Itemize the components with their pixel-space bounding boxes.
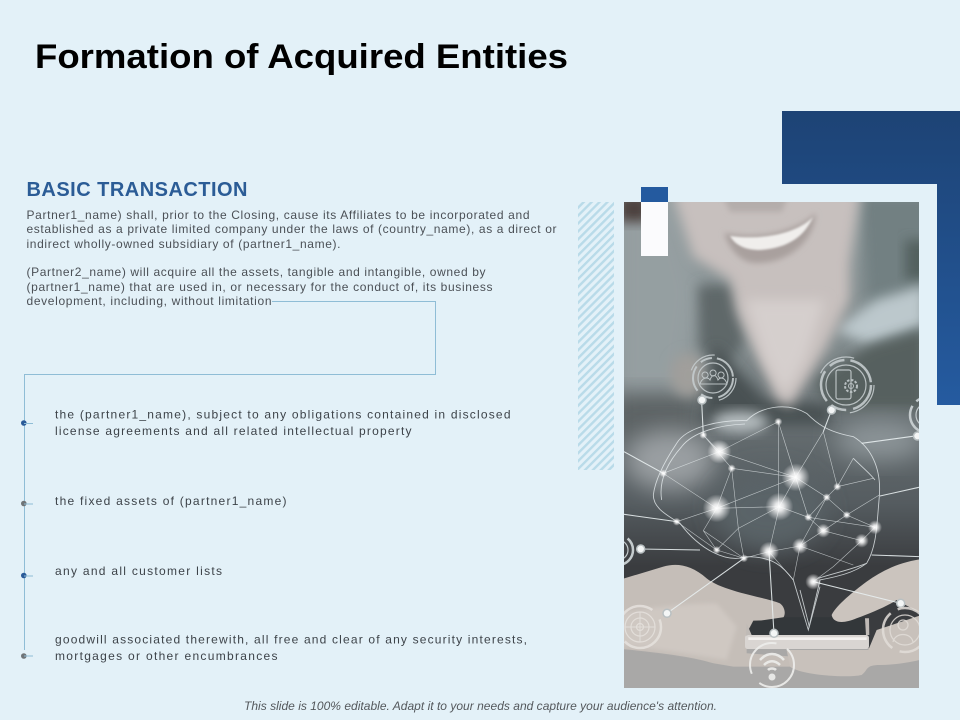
icon: phone with gear <box>818 357 874 413</box>
decorative blue L-shaped block <box>782 111 960 405</box>
list item 1: license agreements and all related intellectual property <box>55 424 412 438</box>
text block: first paragraph: established as a private limited company under the laws of (country_name), as a direct or <box>26 222 556 236</box>
text block: second paragraph: (partner1_name) that are used in, or necessary for the conduct of, its business <box>26 280 493 294</box>
text block: first paragraph: indirect wholly-owned subsidiary of (partner1_name). <box>26 237 341 251</box>
lower right hand <box>787 613 927 676</box>
connector line from paragraph to list <box>24 302 436 650</box>
list item 1: the (partner1_name), subject to any obligations contained in disclosed <box>55 408 510 422</box>
list item 2: the fixed assets of (partner1_name) <box>55 494 286 508</box>
striped decorative panel <box>578 202 614 470</box>
list item 4: goodwill associated therewith, all free and clear of any security interests, <box>55 632 527 646</box>
brain outline <box>653 407 880 630</box>
list item 1 <box>21 408 510 438</box>
left hand <box>613 565 793 667</box>
right upper fingers <box>832 558 927 622</box>
text block: first paragraph: Partner1_name) shall, prior to the Closing, cause its Affiliates to be incorporated and <box>26 208 530 222</box>
phone body <box>745 618 869 649</box>
text block: second paragraph: (Partner2_name) will acquire all the assets, tangible and intangible, owned by <box>26 265 486 279</box>
list item 4: mortgages or other encumbrances <box>55 649 278 663</box>
face and neck <box>668 180 862 407</box>
photo: woman with phone and brain network <box>624 202 919 688</box>
table surface <box>624 648 919 688</box>
text block: second paragraph: development, including, without limitation <box>26 294 272 308</box>
title: Formation of Acquired Entities <box>35 38 568 76</box>
white tab over photo <box>641 202 668 256</box>
icon: wifi <box>750 643 794 687</box>
footer note: This slide is 100% editable. Adapt it to your needs and capture your audience's attention. <box>244 699 717 713</box>
brain network <box>624 402 919 633</box>
smile <box>724 213 816 263</box>
list item 4 <box>21 632 527 663</box>
network mesh lines <box>663 422 879 582</box>
text block: second paragraph <box>26 265 493 308</box>
outgoing spokes <box>624 402 919 633</box>
text block: first paragraph <box>26 208 556 251</box>
icon: partial ring left <box>624 538 634 566</box>
left hand shading <box>624 605 734 658</box>
icon: partial ring right <box>908 398 919 432</box>
icon: target <box>619 606 661 648</box>
phone screen <box>762 617 784 620</box>
white endpoint dots <box>637 396 922 637</box>
icon: people <box>690 355 736 401</box>
list item 3: any and all customer lists <box>55 564 222 578</box>
glowing network nodes <box>659 418 882 590</box>
blurred hair and background <box>610 190 930 550</box>
icon: person <box>883 608 927 652</box>
small blue tab above photo <box>641 187 668 202</box>
hands and phone <box>613 558 927 676</box>
heading: basic transaction: BASIC TRANSACTION <box>26 179 248 201</box>
